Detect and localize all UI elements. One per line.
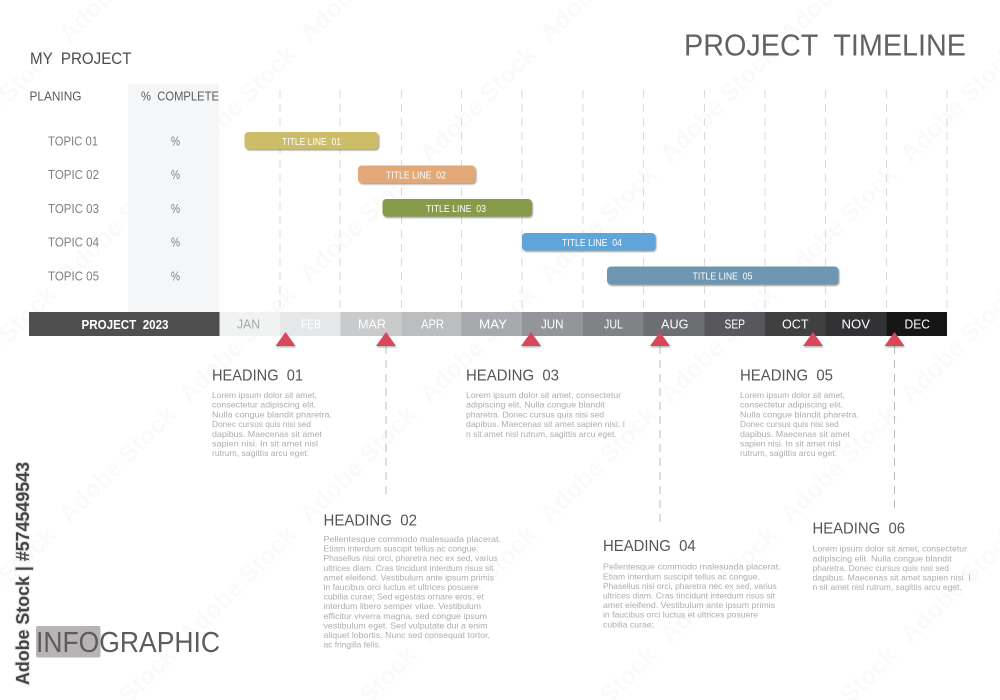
milestone 05: HEADING 05: [740, 368, 833, 384]
milestone 01: sapien nisi. In sit amet nisl: [212, 440, 318, 448]
milestone 02: aliquet lobortis. Nunc sed consequat tortor,: [324, 631, 490, 640]
month cells: MAR: [358, 318, 386, 332]
milestone 01: Donec cursus quis nisi sed: [212, 420, 311, 429]
milestone 03: adipiscing elit. Nulla congue blandit: [466, 401, 605, 410]
month cells: APR: [421, 318, 444, 332]
milestone 04: [603, 538, 781, 629]
topic list: [48, 134, 99, 283]
milestone 02: Etiam interdum suscipit tellus ac congue.: [324, 545, 478, 554]
percent values: %: [171, 201, 180, 216]
month cells: [220, 312, 947, 336]
milestone 02: interdum libero semper vitae. Vestibulum: [324, 602, 481, 611]
milestone 01: dapibus. Maecenas sit amet: [212, 430, 323, 439]
gantt bar 04: TITLE LINE 04: [562, 237, 622, 249]
milestone 05: rutrum, sagittis arcu eget.: [740, 449, 837, 458]
milestone 03: Lorem ipsum dolor sit amet, consectetur: [466, 391, 621, 400]
percent values: %: [171, 235, 180, 250]
percent values: %: [171, 167, 180, 182]
month cells: JAN: [237, 318, 260, 332]
milestone 05: Nulla congue blandit pharetra.: [740, 410, 859, 419]
milestone 02: vestibulum eget. Sed vulputate dui a enim: [324, 621, 488, 630]
gantt bar 01: TITLE LINE 01: [282, 136, 341, 148]
month cells: NOV: [842, 318, 871, 332]
milestone 01: rutrum, sagittis arcu eget.: [212, 449, 309, 458]
month cells: SEP: [724, 318, 745, 332]
milestone 04: Etiam interdum suscipit tellus ac congue.: [603, 572, 760, 581]
month cells: DEC: [904, 318, 930, 332]
month cells: AUG: [661, 318, 688, 332]
planning column heading: PLANING: [30, 90, 82, 104]
milestone 06: Lorem ipsum dolor sit amet, consectetur: [812, 545, 967, 554]
milestone 01: Lorem ipsum dolor sit amet,: [212, 391, 317, 400]
milestone 01: HEADING 01: [212, 368, 303, 384]
vertical stock id label: Adobe Stock | #574549543: [13, 462, 33, 685]
milestone 03: pharetra. Donec cursus quis nisi sed: [466, 410, 604, 419]
milestone 06: [812, 520, 971, 592]
project year label: [29, 312, 220, 336]
milestone 04: Phasellus nisi orci, pharetra nec ex sed, varius: [603, 582, 777, 591]
infographic label: INFOGRAPHIC: [36, 627, 220, 659]
milestone 02: amet eleifend. Vestibulum ante ipsum primis: [324, 573, 494, 582]
title: PROJECT TIMELINE: [684, 28, 966, 62]
project year label: PROJECT 2023: [82, 317, 168, 332]
milestone 02: ac fringilla felis.: [324, 641, 381, 650]
milestone 02: Pellentesque commodo malesuada placerat.: [324, 535, 501, 544]
milestone 02: Phasellus nisi orci, pharetra nec ex sed, varius: [324, 554, 498, 563]
milestone 04: Pellentesque commodo malesuada placerat.: [603, 563, 781, 572]
milestone 04: cubilia curae;: [603, 620, 654, 629]
milestone 02: [324, 512, 501, 650]
milestone 05: Donec cursus quis nisi sed: [740, 420, 839, 429]
milestone 05: Lorem ipsum dolor sit amet,: [740, 391, 845, 400]
milestone 06: HEADING 06: [812, 520, 905, 538]
milestone 02: efficitur viverra magna, sed congue ipsum: [324, 612, 487, 621]
month cells: JUN: [541, 318, 564, 332]
gantt bar 03: TITLE LINE 03: [426, 203, 486, 215]
milestone 04: in faucibus orci luctus et ultrices posuere: [603, 611, 758, 620]
milestone 02: ultrices diam. Cras tincidunt interdum risus sit: [324, 564, 494, 573]
milestone 05: sapien nisi. In sit amet nisl: [740, 440, 841, 448]
milestone 02: cubilia curae; Sed egestas ornare eros, et: [324, 593, 485, 602]
milestone 03: HEADING 03: [466, 368, 559, 384]
milestone 06: dapibus. Maecenas sit amet sapien nisi. I: [812, 574, 971, 582]
topic list: TOPIC 02: [48, 167, 99, 182]
milestone 04: amet eleifend. Vestibulum ante ipsum primis: [603, 601, 775, 610]
gantt bar 03: [382, 199, 532, 216]
gantt bar 04: [522, 233, 656, 250]
project name: MY PROJECT: [30, 50, 132, 68]
percent values: %: [171, 268, 180, 283]
gantt bar 05: TITLE LINE 05: [692, 270, 753, 282]
percent complete column heading: % COMPLETE: [141, 90, 219, 104]
topic list: TOPIC 03: [48, 201, 99, 216]
milestone 01: consectetur adipiscing elit.: [212, 401, 316, 410]
month cells: OCT: [782, 318, 809, 332]
milestone 03: dapibus. Maecenas sit amet sapien nisi. I: [466, 420, 625, 429]
month cells: FEB: [301, 318, 321, 332]
percent values: [171, 134, 180, 283]
milestone 06: adipiscing elit. Nulla congue blandit: [812, 554, 952, 563]
gantt bar 01: [244, 132, 378, 149]
milestone 01: Nulla congue blandit pharetra.: [212, 410, 332, 419]
milestone 04: HEADING 04: [603, 538, 696, 555]
gantt bar 02: [358, 166, 476, 183]
milestone 04: ultrices diam. Cras tincidunt interdum risus sit: [603, 592, 776, 600]
month cells: JUL: [604, 318, 623, 332]
milestone 02: HEADING 02: [324, 512, 417, 530]
topic list: TOPIC 01: [48, 134, 98, 148]
topic list: TOPIC 05: [48, 268, 99, 283]
milestone 03: n sit amet nisl rutrum, sagittis arcu eget.: [466, 430, 617, 439]
milestone 05: consectetur adipiscing elit.: [740, 401, 843, 410]
topic list: TOPIC 04: [48, 235, 99, 250]
month cells: MAY: [479, 318, 508, 332]
milestone 05: dapibus. Maecenas sit amet: [740, 430, 851, 439]
timeline strip: [29, 312, 947, 336]
gantt bar 05: [607, 266, 838, 284]
gantt bar 02: TITLE LINE 02: [386, 170, 446, 182]
milestone markers: [276, 332, 904, 346]
panel: % complete column: [128, 84, 219, 312]
percent values: %: [171, 134, 180, 148]
milestone 06: pharetra. Donec cursus quis nisi sed: [812, 564, 949, 573]
milestone 05: [740, 368, 859, 458]
milestone 06: n sit amet nisl rutrum, sagittis arcu eget.: [812, 583, 962, 592]
milestone 01: [212, 368, 332, 458]
milestone 02: in faucibus orci luctus et ultrices posuere: [324, 583, 479, 592]
milestone 03: [466, 368, 625, 439]
